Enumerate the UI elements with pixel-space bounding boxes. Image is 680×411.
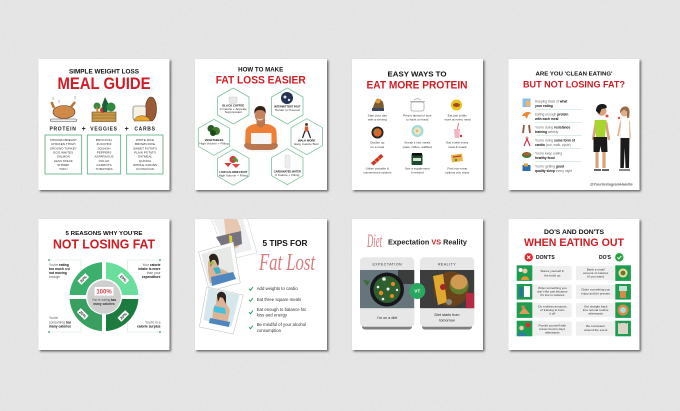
row: bank calories xyxy=(576,265,631,281)
row: be consistent: Be consistent xyxy=(586,324,605,328)
list: protein: CHICKEN BREAST xyxy=(50,138,77,142)
title: fat loss easier: FAT LOSS EASIER xyxy=(216,74,306,86)
callouts with connector lines: You're eating xyxy=(49,263,69,267)
list: veggies: ASPARAGUS xyxy=(94,155,114,159)
item: double up: Double up xyxy=(370,141,385,145)
item: sneak into meals: (oats, coffee, waffles) xyxy=(403,145,432,149)
hexagon: vegetables xyxy=(198,119,230,155)
list: protein: CHICKEN THIGH xyxy=(51,142,75,146)
photo stack xyxy=(198,218,257,334)
list: carbs: PLAIN POTATO xyxy=(134,150,157,154)
illustration: man eating xyxy=(593,104,609,170)
item: supplement tub: if needed xyxy=(411,170,424,174)
list: protein: EGG WHITES xyxy=(53,150,73,154)
callouts with connector lines: not moving xyxy=(49,271,67,275)
item: shake with every meal xyxy=(446,123,469,149)
hexagon: carbonated water xyxy=(272,149,303,185)
row: order what you enjoy xyxy=(576,284,631,300)
row: bank calories: amount of calories xyxy=(583,271,609,275)
item: portable bar: convenience options xyxy=(363,170,392,174)
callouts with connector lines: You're xyxy=(49,316,58,320)
checklist: your eating xyxy=(535,104,553,108)
value label: bottom right: 20% xyxy=(119,311,128,321)
tip list: consumption xyxy=(257,328,282,333)
callouts with connector lines: consuming too xyxy=(49,320,71,324)
list: protein xyxy=(45,135,82,174)
checklist: You're getting good xyxy=(535,164,564,168)
item: a little at every meal: Eat just a little xyxy=(448,114,467,118)
panel: not losing fat xyxy=(38,219,171,352)
item: prep ahead xyxy=(403,99,432,122)
row: mindless eating xyxy=(517,302,572,318)
panel: 5 tips for fat lost xyxy=(195,218,328,352)
panel: meal guide xyxy=(38,59,171,192)
item: shake with every meal: meal & snack xyxy=(448,145,467,149)
item: supplement tub xyxy=(405,153,430,174)
callouts with connector lines: too much and xyxy=(49,267,70,271)
item: supplement tub: Use a supplement xyxy=(405,166,430,170)
heading: easy ways to: EASY WAYS TO xyxy=(388,70,447,79)
heading: are you clean eating: ARE YOU 'CLEAN EATING' xyxy=(536,71,613,77)
row: get straight back: Get straight back xyxy=(584,304,608,308)
hexagon: intermittent fast: Harder to Overeat xyxy=(275,108,300,112)
row: be consistent xyxy=(576,321,631,336)
center value: many calories xyxy=(93,302,115,306)
row: mindless eating: Do endless amounts xyxy=(538,304,567,308)
title: meal guide: MEAL GUIDE xyxy=(58,75,150,93)
title: eat more protein: EAT MORE PROTEIN xyxy=(366,80,468,92)
callouts with connector lines: intake is more xyxy=(138,267,161,271)
food group labels: PROTEIN xyxy=(49,127,77,133)
center value: 100% xyxy=(96,289,112,295)
item: prep ahead: to have on hand xyxy=(406,118,429,122)
handle: @YourInstagramHandle xyxy=(590,182,633,186)
polaroid: waist measure xyxy=(211,218,257,260)
row: get straight back: afterwards xyxy=(588,312,603,316)
checklist: with each meal xyxy=(534,117,559,121)
panel: expectation vs reality: Diet xyxy=(367,231,382,252)
food group labels xyxy=(49,126,156,133)
value label: bottom left: 20% xyxy=(78,309,88,319)
item: sneak into meals xyxy=(403,125,432,149)
row: punish yourself xyxy=(517,321,572,336)
value label: top left: 20% xyxy=(79,274,88,284)
item: serving at breakfast: Start your day xyxy=(368,114,387,118)
card: reality: REALITY xyxy=(438,262,456,266)
hexagon: black coffee: Suppressant xyxy=(225,110,242,114)
row: order what you enjoy: enjoy and be present xyxy=(581,292,610,296)
row: order as healthy: it's low in calories xyxy=(540,293,565,297)
checklist: You're keep eating xyxy=(535,151,562,155)
title: expectation vs reality: Expectation VS Reality xyxy=(388,240,467,247)
hexagon: black coffee xyxy=(218,88,249,124)
tip list: loss and energy xyxy=(257,313,288,318)
row: bank calories: (if you want) xyxy=(587,274,604,278)
list: veggies: OKLAO xyxy=(99,159,110,163)
list: protein: TOFU xyxy=(59,167,67,171)
card: reality: tomorrow xyxy=(439,319,455,323)
list: carbs: SWEET POTATO xyxy=(133,146,158,150)
checklist: You're doing resistance xyxy=(535,125,571,129)
checklist: healthy food xyxy=(535,156,555,160)
list: veggies: TOMATOES xyxy=(95,167,113,171)
hexagon: intermittent fast xyxy=(272,88,303,124)
card: reality xyxy=(420,257,474,330)
callouts with connector lines: many calories xyxy=(49,324,71,328)
callouts with connector lines: You're in a xyxy=(145,320,161,324)
hexagon: black coffee: 0 Calorie + Appetite xyxy=(220,107,247,111)
panel: do's and don'ts xyxy=(508,219,641,352)
item: portable bar: Utilize portable & xyxy=(366,166,390,170)
row: mindless eating: it off xyxy=(549,312,555,316)
icon: roast chicken xyxy=(50,96,76,122)
item: sneak into meals: Sneak it into meals xyxy=(404,141,431,145)
callouts with connector lines: expenditure xyxy=(142,275,161,279)
list: carbs: COUSCOUS xyxy=(136,167,154,171)
script title: fat lost: Fat Lost xyxy=(258,250,316,276)
heading: 5 reasons: 5 REASONS WHY YOU'RE xyxy=(66,231,143,237)
hexagon: walk more: Easy Calorie Burn xyxy=(294,142,319,146)
heading: dos and donts: DO'S AND DON'TS xyxy=(544,229,604,236)
row: mindless eating: of training to burn xyxy=(540,308,565,312)
checklist: cardio (run, walk, cycle) xyxy=(535,143,571,147)
card: expectation xyxy=(360,257,414,330)
callouts with connector lines: than your xyxy=(147,271,161,275)
list: carbs: WHOLE GRAINS xyxy=(133,163,157,167)
list: veggies: BROCCOLI xyxy=(96,138,112,142)
row: punish yourself: afterwards xyxy=(545,330,560,334)
food group labels: + xyxy=(125,126,129,133)
photo: smiling man with crossed arms xyxy=(244,106,278,152)
tip list: Eat enough to balance fat xyxy=(257,307,306,312)
hexagon: carbonated water: 0 Calorie + Filling xyxy=(275,173,300,177)
tip list: Eat three square meals xyxy=(257,297,301,302)
list: veggies: ZUCCHINI xyxy=(97,142,112,146)
photo: salad xyxy=(360,270,414,308)
row: bank calories: Bank a small xyxy=(587,268,605,272)
title: when eating out: WHEN EATING OUT xyxy=(524,237,624,249)
hexagon: carbonated water: CARBONATED WATER xyxy=(274,170,301,174)
item: a little at every meal: more at every meal xyxy=(444,118,471,122)
tip list: Be mindful of your alcohol xyxy=(257,322,306,327)
card: reality: Diet starts from xyxy=(434,313,460,317)
checklist: Keeping track of what xyxy=(535,99,568,103)
item: double up xyxy=(370,126,385,149)
item: prep ahead: Prep it ahead of time xyxy=(403,114,432,118)
icon: veggie crate xyxy=(92,97,116,122)
value label: top right: 20% xyxy=(119,274,128,283)
row: be consistent: around the event xyxy=(584,328,607,332)
item: a little at every meal xyxy=(444,100,471,122)
panel: eat more protein xyxy=(352,59,484,192)
heading: simple weight loss: SIMPLE WEIGHT LOSS xyxy=(69,68,139,75)
heading: 5 tips for: 5 TIPS FOR xyxy=(262,239,308,248)
card: expectation: EXPECTATION xyxy=(372,262,402,266)
tip list: Add weights to cardio xyxy=(257,286,298,291)
donut chart xyxy=(70,262,138,331)
list: carbs: QUINOA xyxy=(139,159,152,163)
panel: expectation vs reality xyxy=(352,219,484,352)
icon: bread loaf xyxy=(133,97,156,121)
badge: versus: VT xyxy=(414,289,420,295)
illustration: woman eating xyxy=(618,106,630,170)
checklist: quality sleep every night xyxy=(535,169,572,173)
hexagon: vegetables: VEGETABLES xyxy=(205,138,224,142)
title: not losing fat: NOT LOSING FAT xyxy=(53,237,155,252)
row: punish yourself: Punish yourself with xyxy=(539,324,566,328)
list: protein: SALMON xyxy=(57,155,70,159)
item: portable bar xyxy=(363,154,392,174)
callouts with connector lines: Your calorie xyxy=(142,263,161,267)
card: expectation: I'm on a diet xyxy=(377,316,397,320)
food group labels: + xyxy=(82,126,86,133)
item: double up: on a meal xyxy=(371,145,384,149)
hexagon: low calorie fruit: High Volume + Filling xyxy=(219,174,248,178)
list: protein: GROUND TURKEY xyxy=(50,146,77,150)
photo: burger and fries xyxy=(420,270,474,308)
hexagon: intermittent fast: INTERMITTENT FAST xyxy=(274,104,301,108)
item: non-meat options xyxy=(445,154,470,174)
row: starve yourself: Starve yourself in xyxy=(540,269,565,273)
food group labels: VEGGIES xyxy=(90,127,118,133)
list: carbs xyxy=(127,135,163,174)
list: carbs: BROWN RICE xyxy=(135,142,155,146)
checklist: You're doing some form of xyxy=(535,138,576,142)
hexagon: vegetables: High Volume + Filling xyxy=(199,142,229,146)
item: serving at breakfast xyxy=(368,98,387,122)
item: shake with every meal: Eat it with every xyxy=(446,141,469,145)
hexagon: walk more: WALK MORE xyxy=(298,138,316,142)
title: but not losing fat: BUT NOT LOSING FAT? xyxy=(523,79,625,89)
panel: clean eating xyxy=(508,59,641,192)
row: order as healthy: Order something you xyxy=(538,286,567,290)
panel: fat loss easier xyxy=(195,59,328,192)
list: carbs: WHITE RICE xyxy=(136,138,154,142)
row: order as healthy xyxy=(517,284,572,300)
polaroid: woman with tape xyxy=(199,287,243,334)
list: veggies: SQUASH xyxy=(97,146,111,150)
hexagon: low calorie fruit xyxy=(218,149,249,185)
list: veggies: CARROTS xyxy=(96,163,112,167)
checklist xyxy=(522,98,582,173)
row: order as healthy: don't like just because xyxy=(537,290,568,294)
column header: donts: DON'TS xyxy=(536,255,555,261)
heading: how to make: HOW TO MAKE xyxy=(238,68,283,74)
tip list xyxy=(249,286,306,333)
food group labels: CARBS xyxy=(134,127,156,133)
list: carbs: OATMEAL xyxy=(138,155,153,159)
callouts with connector lines: enough xyxy=(49,275,60,279)
list: protein: LEAN STEAK xyxy=(54,159,74,163)
row: get straight back xyxy=(576,302,631,318)
row: order what you enjoy: Order something you xyxy=(581,288,610,292)
list: veggies xyxy=(87,135,121,174)
row: get straight back: into normal routine xyxy=(583,308,609,312)
row: starve yourself: the build up xyxy=(544,274,561,278)
list: protein: SHRIMP xyxy=(57,163,69,167)
item: serving at breakfast: with a serving xyxy=(368,118,387,122)
polaroid: woman with apple xyxy=(198,242,240,291)
item: non-meat options: Find non-meat xyxy=(447,166,467,170)
callouts with connector lines xyxy=(48,259,161,333)
column header: dos: DO'S xyxy=(599,255,612,261)
row: punish yourself: lesser food in days xyxy=(539,327,566,331)
item: non-meat options: options you enjoy xyxy=(445,170,470,174)
hexagon: black coffee: BLACK COFFEE xyxy=(222,104,244,108)
hexagon: low calorie fruit: LOW CALORIE FRUIT xyxy=(219,170,248,174)
center value xyxy=(92,287,116,306)
callouts with connector lines: calorie surplus xyxy=(137,324,161,328)
list: veggies: PEPPERS xyxy=(97,150,111,154)
row: starve yourself xyxy=(517,265,572,281)
hexagon: walk more xyxy=(291,119,322,155)
checklist: training weekly xyxy=(535,130,558,134)
checklist: Eating enough protein xyxy=(535,112,568,116)
center value: You're eating too xyxy=(92,298,116,302)
